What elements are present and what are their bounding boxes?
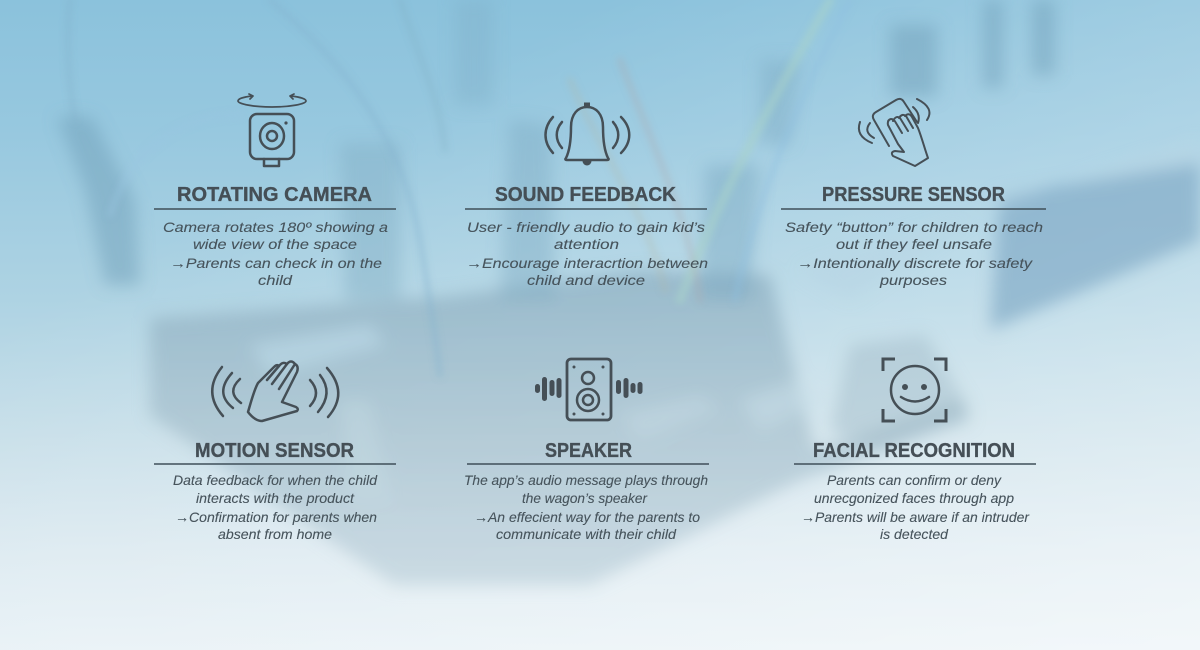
panel: sound feedback <box>465 102 708 288</box>
icon: speaker with sound bars <box>535 359 642 420</box>
description: rotating camera <box>163 219 388 288</box>
description: pressure sensor: out if they feel unsafe <box>836 236 992 252</box>
panel: motion sensor <box>154 362 396 542</box>
description: pressure sensor: Safety “button” for children to reach <box>785 219 1043 235</box>
icon: bell with sound waves <box>546 102 629 166</box>
description: facial recognition: →Parents will be aware if an intruder <box>801 509 1030 525</box>
description: rotating camera: wide view of the space <box>193 236 357 252</box>
heading: speaker: SPEAKER <box>545 440 632 462</box>
description: facial recognition <box>801 472 1030 542</box>
heading: rotating camera: ROTATING CAMERA <box>177 184 372 206</box>
description: sound feedback <box>466 219 708 288</box>
description: sound feedback: User - friendly audio to gain kid’s <box>467 219 705 235</box>
icon: rotating camera <box>238 94 306 166</box>
panel: rotating camera <box>154 94 396 288</box>
description: speaker: the wagon’s speaker <box>522 490 648 506</box>
description: rotating camera: child <box>258 272 293 288</box>
description: rotating camera: →Parents can check in on the <box>170 255 382 271</box>
description: pressure sensor: purposes <box>879 272 947 288</box>
description: facial recognition: Parents can confirm or deny <box>827 472 1002 488</box>
description: speaker: →An effecient way for the parents to <box>474 509 700 525</box>
description: motion sensor: →Confirmation for parents when <box>175 509 377 525</box>
icon: face scan <box>883 359 946 421</box>
description: speaker: The app’s audio message plays through <box>464 472 708 488</box>
description: motion sensor: interacts with the product <box>196 490 355 506</box>
panel: pressure sensor <box>781 99 1046 288</box>
icon: hand pressing pad <box>859 99 929 166</box>
panel: facial recognition <box>794 359 1036 542</box>
description: speaker: communicate with their child <box>496 526 677 542</box>
description: motion sensor: Data feedback for when the child <box>173 472 378 488</box>
description: motion sensor <box>173 472 378 542</box>
description: pressure sensor <box>785 219 1043 288</box>
panel: speaker <box>464 359 709 542</box>
description: pressure sensor: →Intentionally discrete for safety <box>797 255 1033 271</box>
description: motion sensor: absent from home <box>218 526 332 542</box>
heading: sound feedback: SOUND FEEDBACK <box>495 184 677 206</box>
heading: pressure sensor: PRESSURE SENSOR <box>822 184 1005 206</box>
description: speaker <box>464 472 708 542</box>
description: sound feedback: child and device <box>527 272 645 288</box>
description: facial recognition: is detected <box>880 526 949 542</box>
description: facial recognition: unrecgonized faces through app <box>814 490 1014 506</box>
icon: waving hand <box>212 362 338 421</box>
description: sound feedback: attention <box>554 236 619 252</box>
heading: motion sensor: MOTION SENSOR <box>195 440 355 462</box>
heading: facial recognition: FACIAL RECOGNITION <box>813 440 1015 462</box>
description: rotating camera: Camera rotates 180º showing a <box>163 219 388 235</box>
description: sound feedback: →Encourage interacrtion between <box>466 255 708 271</box>
